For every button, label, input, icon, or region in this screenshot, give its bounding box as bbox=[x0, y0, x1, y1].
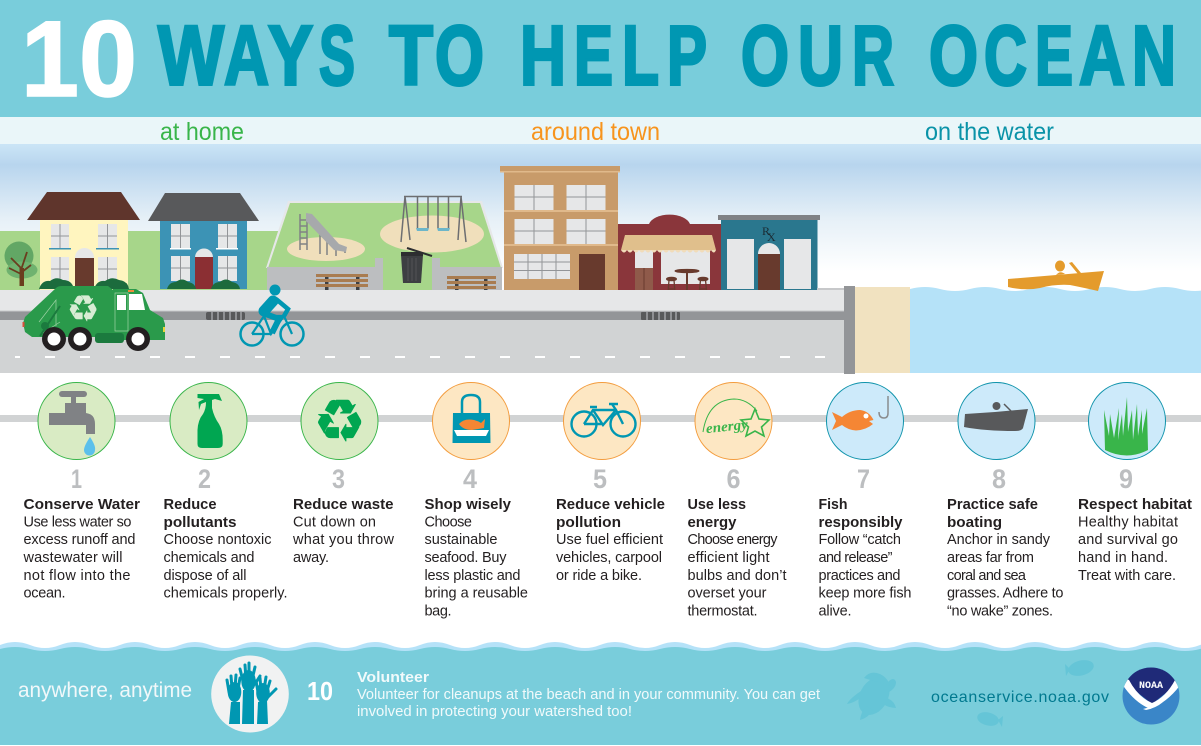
step 8: practice safe boating bbox=[947, 382, 1064, 620]
house: yellow bbox=[27, 192, 140, 290]
rx sign bbox=[762, 224, 776, 244]
icon: recycle bbox=[301, 382, 378, 460]
step text 4: Shop wisely bbox=[424, 496, 512, 513]
step number 8: 8 bbox=[992, 464, 1006, 494]
step text 6: energy bbox=[688, 514, 737, 531]
title: ways to help our ocean: A bbox=[1079, 8, 1125, 102]
step text 9: and survival go bbox=[1078, 532, 1178, 548]
step text 1: Use less water so bbox=[24, 514, 132, 530]
step 1: conserve water bbox=[22, 382, 140, 602]
step text 6: Use less bbox=[688, 496, 746, 513]
step text 3: Cut down on bbox=[293, 514, 376, 530]
playground bbox=[266, 196, 503, 295]
step text 3: away. bbox=[293, 550, 329, 566]
garbage truck bbox=[22, 286, 165, 351]
step text 8: coral and sea bbox=[947, 568, 1027, 584]
step 5: reduce vehicle pollution bbox=[556, 382, 665, 584]
footer panel bbox=[0, 642, 1201, 745]
step text 6: thermostat. bbox=[688, 604, 758, 620]
icon: fish and hook bbox=[826, 382, 904, 460]
step text 8: “no wake” zones. bbox=[947, 604, 1053, 620]
title: ways to help our ocean: W bbox=[158, 8, 225, 102]
step number 1: 1 bbox=[71, 464, 82, 494]
icon: spray bottle bbox=[170, 382, 247, 460]
step text 7: Follow “catch bbox=[818, 532, 901, 548]
step text 8 bbox=[947, 496, 1064, 620]
step text 6 bbox=[688, 496, 786, 620]
icon: faucet bbox=[38, 382, 115, 460]
step 2: reduce pollutants bbox=[164, 382, 288, 602]
logo: noaa: NOAA bbox=[1139, 681, 1163, 692]
step text 2: chemicals properly. bbox=[164, 586, 288, 602]
rx sign: X bbox=[767, 230, 776, 244]
step text 4: bag. bbox=[424, 604, 452, 620]
cafe table and stools bbox=[666, 269, 708, 300]
building: pharmacy bbox=[718, 215, 820, 292]
step text 1: ocean. bbox=[24, 586, 66, 602]
title: ways to help our ocean: E bbox=[1035, 8, 1073, 102]
icon: recycle: ♻ bbox=[314, 387, 366, 455]
step text 2: Reduce bbox=[164, 496, 216, 513]
step text 7: Fish bbox=[818, 496, 848, 513]
step text 1: not flow into the bbox=[24, 568, 130, 584]
section label strip bbox=[0, 117, 1201, 146]
title: ways to help our ocean: R bbox=[852, 8, 894, 102]
seawall and sand bbox=[844, 286, 910, 374]
step text 8: grasses. Adhere to bbox=[947, 586, 1064, 602]
step text 5 bbox=[556, 496, 665, 584]
step text 6: Choose energy bbox=[688, 532, 778, 548]
header band bbox=[0, 0, 1201, 119]
storm drain 2 bbox=[641, 312, 680, 320]
title: ways to help our ocean: P bbox=[667, 8, 707, 102]
house: blue bbox=[148, 193, 259, 289]
icon: motor boat bbox=[958, 382, 1035, 460]
step text 7: responsibly bbox=[818, 514, 903, 531]
step 4: shop wisely bbox=[424, 382, 528, 620]
step text 2: Choose nontoxic bbox=[164, 532, 272, 548]
title: ways to help our ocean: O bbox=[929, 8, 978, 102]
step text 2: pollutants bbox=[164, 514, 236, 531]
step text 7 bbox=[818, 496, 912, 620]
step text 3 bbox=[292, 496, 395, 566]
building: tan apartments bbox=[500, 166, 620, 292]
bench 1 bbox=[316, 274, 368, 294]
step number 6: 6 bbox=[726, 464, 740, 494]
step text 9 bbox=[1078, 496, 1192, 584]
step number 5: 5 bbox=[593, 464, 607, 494]
step text 9: Healthy habitat bbox=[1078, 514, 1178, 530]
icon: bicycle bbox=[564, 382, 640, 460]
boat bbox=[1008, 260, 1104, 291]
icon: small fish bbox=[976, 710, 1003, 728]
step text 5: vehicles, carpool bbox=[556, 550, 662, 566]
title number 10: 10 bbox=[21, 0, 137, 119]
step text 1: excess runoff and bbox=[24, 532, 136, 548]
truck recycle symbol: ♻ bbox=[67, 289, 99, 330]
step number 7: 7 bbox=[857, 464, 870, 494]
icon: energy star bbox=[695, 382, 772, 460]
step text 8: Anchor in sandy bbox=[947, 532, 1051, 548]
volunteer text: involved in protecting your watershed too! bbox=[357, 704, 632, 720]
step number 9: 9 bbox=[1119, 464, 1133, 494]
step text 8: boating bbox=[947, 514, 1002, 531]
step text 9: hand in hand. bbox=[1078, 550, 1168, 566]
step text 7: practices and bbox=[818, 568, 900, 584]
bench 2 bbox=[447, 276, 496, 295]
step 7: fish responsibly bbox=[818, 382, 912, 620]
step number 3: 3 bbox=[332, 464, 345, 494]
step text 6: overset your bbox=[688, 586, 767, 602]
timeline bar bbox=[0, 415, 1201, 422]
title: ways to help our ocean: H bbox=[520, 8, 566, 102]
step text 6: bulbs and don’t bbox=[688, 568, 786, 584]
step text 8: Practice safe bbox=[947, 496, 1038, 513]
step text 9: Respect habitat bbox=[1078, 496, 1192, 513]
step text 4: sustainable bbox=[424, 532, 498, 548]
volunteer text: Volunteer for cleanups at the beach and in your community. You can get bbox=[357, 687, 820, 703]
step text 5: pollution bbox=[556, 514, 621, 531]
storm drain 1 bbox=[206, 312, 245, 320]
rx sign: R bbox=[762, 224, 770, 238]
step text 4: Choose bbox=[424, 514, 472, 530]
title: ways to help our ocean: A bbox=[224, 8, 269, 102]
cyclist bbox=[240, 284, 304, 346]
label: around town: around town bbox=[531, 118, 660, 146]
step text 7: keep more fish bbox=[818, 586, 912, 602]
step text 1: wastewater will bbox=[22, 550, 122, 566]
label: anywhere, anytime: anywhere, anytime bbox=[18, 678, 192, 702]
icon: sea turtle bbox=[847, 672, 896, 720]
swing set bbox=[401, 196, 466, 242]
title: ways to help our ocean: L bbox=[622, 8, 659, 102]
label: at home: at home bbox=[160, 118, 244, 146]
title: ways to help our ocean: Y bbox=[268, 8, 313, 102]
tree bbox=[4, 242, 38, 286]
step text 5: or ride a bike. bbox=[556, 568, 642, 584]
title: ways to help our ocean: O bbox=[435, 8, 484, 102]
title: ways to help our ocean: C bbox=[984, 8, 1027, 102]
step 3: reduce waste bbox=[292, 382, 395, 566]
website url: oceanservice.noaa.gov bbox=[931, 689, 1109, 706]
volunteer text bbox=[357, 670, 820, 720]
title: ways to help our ocean: S bbox=[319, 8, 355, 102]
step text 2: dispose of all bbox=[164, 568, 246, 584]
title: ways to help our ocean: T bbox=[389, 8, 433, 102]
step text 4: seafood. Buy bbox=[424, 550, 507, 566]
label: on the water: on the water bbox=[925, 118, 1054, 146]
grass band bbox=[0, 231, 280, 291]
icon: energy star: energy bbox=[705, 418, 749, 437]
water bbox=[910, 287, 1201, 373]
step text 5: Reduce vehicle bbox=[556, 496, 665, 513]
step text 6: efficient light bbox=[688, 550, 770, 566]
icon: sea grass bbox=[1088, 382, 1166, 460]
step text 3: Reduce waste bbox=[293, 496, 394, 513]
step text 7: alive. bbox=[818, 604, 852, 620]
step text 1 bbox=[22, 496, 140, 602]
step text 3: what you throw bbox=[292, 532, 395, 548]
step 9: respect habitat bbox=[1078, 382, 1192, 584]
title: ways to help our ocean bbox=[158, 8, 1176, 102]
step text 1: Conserve Water bbox=[24, 496, 140, 513]
step text 9: Treat with care. bbox=[1078, 568, 1176, 584]
icon: raised hands bbox=[211, 656, 289, 732]
icon: tote bag bbox=[432, 382, 510, 460]
trash can bbox=[401, 248, 432, 283]
number 10: 10 bbox=[307, 676, 333, 706]
title: ways to help our ocean: N bbox=[1132, 8, 1176, 102]
logo: noaa bbox=[1122, 668, 1180, 724]
step text 4 bbox=[424, 496, 528, 620]
step text 2 bbox=[164, 496, 288, 602]
volunteer text: Volunteer bbox=[357, 670, 429, 686]
scene: streetscape bbox=[0, 144, 1201, 374]
step number 4: 4 bbox=[463, 464, 477, 494]
step text 5: Use fuel efficient bbox=[556, 532, 663, 548]
title: ways to help our ocean: O bbox=[741, 8, 789, 102]
icon: fish bbox=[1065, 658, 1095, 678]
step text 4: less plastic and bbox=[424, 568, 520, 584]
title: ways to help our ocean: E bbox=[574, 8, 613, 102]
building: red cafe bbox=[618, 215, 721, 300]
step text 4: bring a reusable bbox=[424, 586, 528, 602]
step text 8: areas far from bbox=[947, 550, 1034, 566]
step text 2: chemicals and bbox=[164, 550, 254, 566]
step text 7: and release” bbox=[818, 550, 893, 566]
sidewalk and road bbox=[0, 288, 844, 373]
title: ways to help our ocean: U bbox=[798, 8, 843, 102]
step number 2: 2 bbox=[198, 464, 211, 494]
slide bbox=[300, 213, 347, 256]
step 6: use less energy bbox=[688, 382, 786, 620]
